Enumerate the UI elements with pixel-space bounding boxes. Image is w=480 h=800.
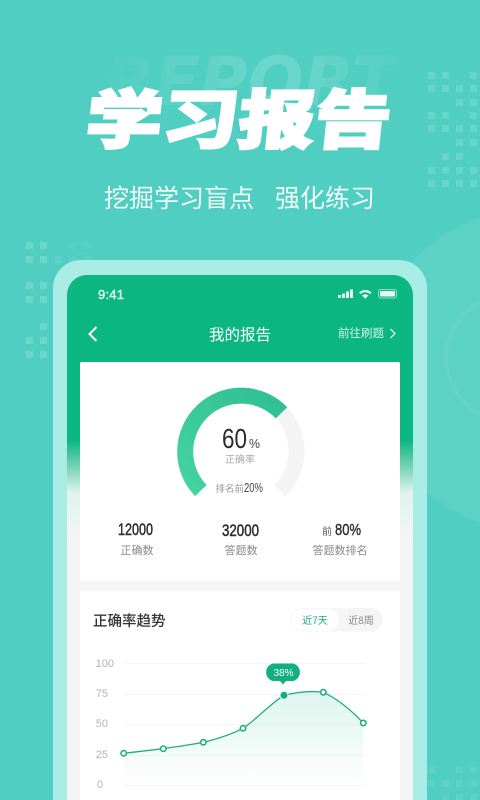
- icon: back arrow: [90, 327, 96, 341]
- line chart: [96, 658, 366, 791]
- stat: correct count: 12000: [118, 521, 153, 539]
- tooltip: [266, 664, 300, 684]
- stat: correct count: 正确数: [120, 542, 154, 558]
- rank label: [216, 481, 263, 495]
- stat: answered ranking: [312, 522, 368, 558]
- stat: answered ranking: 前: [322, 523, 332, 538]
- gauge track: [280, 413, 297, 491]
- subtitle: [104, 179, 375, 215]
- gauge value: 60: [222, 423, 247, 454]
- stat: answered ranking: 80%: [335, 522, 361, 539]
- y-axis labels: 75: [96, 688, 108, 700]
- y-axis labels: 0: [97, 779, 103, 791]
- stat: correct count: [118, 521, 154, 558]
- gauge value: %: [249, 436, 260, 451]
- stat: answered ranking: 答题数排名: [312, 542, 368, 558]
- data points: [121, 690, 366, 756]
- gauge label: 正确率: [225, 451, 255, 466]
- decorative circle: right: [370, 210, 480, 530]
- stat: answered count: 答题数: [224, 542, 258, 558]
- device frame: [53, 260, 427, 800]
- card heading: 正确率趋势: [93, 610, 166, 631]
- subtitle: 挖掘学习盲点: [104, 179, 254, 215]
- area fill: [124, 692, 363, 785]
- grid lines: [124, 664, 366, 786]
- stat: answered count: [222, 522, 259, 558]
- trend line: [124, 692, 363, 753]
- icon: chevron: [390, 329, 395, 338]
- link: 前往刷题: 前往刷题: [338, 325, 384, 341]
- y-axis labels: [96, 658, 114, 791]
- range toggle: 近7天: [302, 612, 328, 627]
- tooltip: 38%: [273, 668, 294, 679]
- dot pattern: top right: [428, 72, 477, 187]
- subtitle: 强化练习: [275, 179, 375, 215]
- ghost word: REPORT: REPORT: [104, 43, 400, 122]
- y-axis labels: 25: [96, 749, 108, 761]
- status icons: [338, 290, 396, 299]
- nav bar: [90, 323, 395, 345]
- title: 学习报告: [82, 70, 397, 162]
- panel: score card: [80, 362, 400, 581]
- range toggle: 近8周: [348, 612, 374, 627]
- dot pattern: bottom right: [428, 766, 477, 800]
- panel: trend card: [80, 591, 400, 800]
- status bar: [98, 287, 396, 302]
- dot pattern: left: [26, 242, 90, 358]
- active data point: [280, 691, 288, 699]
- rank label: 20%: [244, 481, 263, 495]
- clock: 9:41: [98, 287, 124, 302]
- range toggle: [290, 608, 383, 632]
- y-axis labels: 50: [96, 718, 108, 730]
- y-axis labels: 100: [96, 658, 114, 670]
- page title: 我的报告: [209, 323, 271, 345]
- gauge value arc: [185, 396, 282, 491]
- stat: answered count: 32000: [222, 522, 259, 540]
- rank label: 排名前: [216, 481, 244, 495]
